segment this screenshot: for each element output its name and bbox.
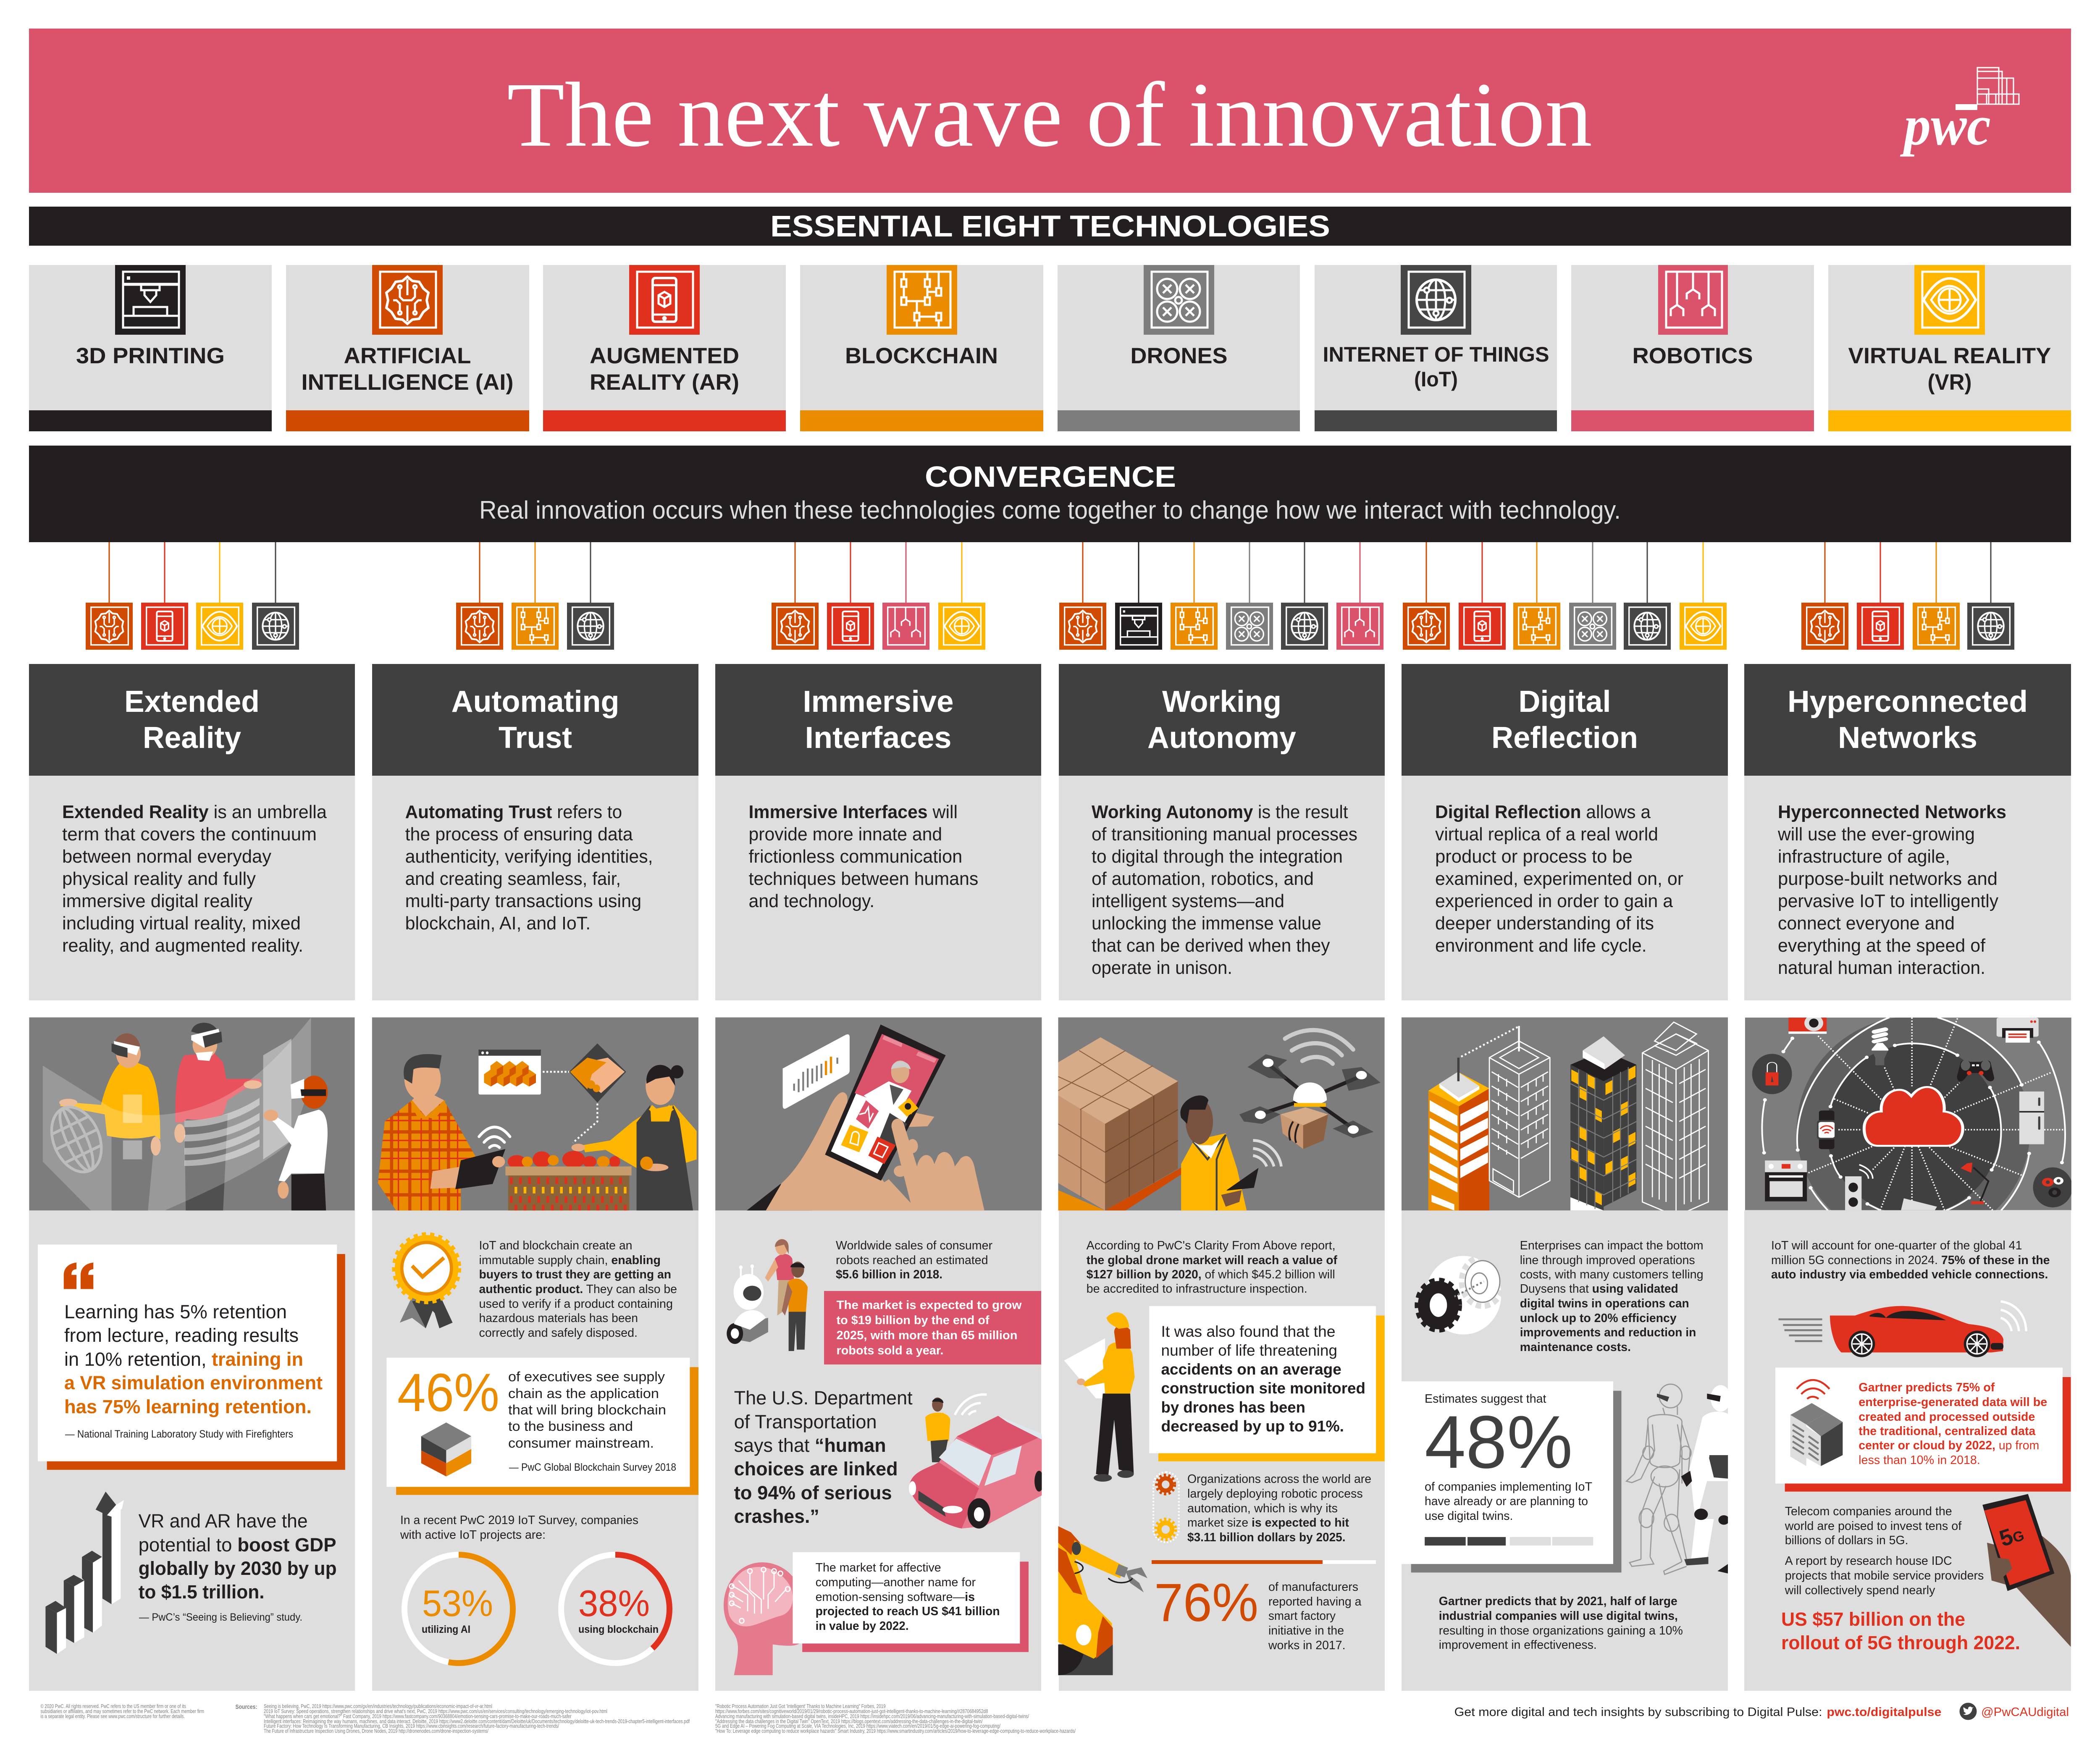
text: department of transportation: choices are linked bbox=[734, 1458, 898, 1480]
connector lines and icons: working autonomy bbox=[1059, 542, 1383, 650]
connector lines and icons: extended reality bbox=[86, 542, 299, 650]
chart: 53% utilizing AI donut bbox=[404, 1555, 513, 1663]
chart: 38% using blockchain donut bbox=[561, 1555, 669, 1663]
column: digital reflection definition: examined, experimented on, or bbox=[1435, 868, 1683, 889]
stat: 76% smart factory bbox=[1152, 1560, 1376, 1652]
stat card: 48% digital twins bbox=[1402, 1381, 1621, 1572]
illustration: hand holding 5G phone bbox=[1982, 1494, 2071, 1647]
column: working autonomy definition: unlocking the immense value bbox=[1092, 913, 1321, 934]
stat card: 46%: chain as the application bbox=[508, 1386, 659, 1401]
icon: quotation marks bbox=[64, 1262, 93, 1289]
card: affective computing: computing—another name for bbox=[816, 1576, 976, 1589]
illustration: drone and warehouse worker bbox=[1058, 1018, 1385, 1210]
technology card: virtual reality: (VR) bbox=[1928, 370, 1971, 395]
text: 5G connections bbox=[1771, 1239, 2050, 1281]
quote card: has 75% learning retention. bbox=[64, 1396, 312, 1417]
text: telecom investment bbox=[1781, 1505, 2020, 1653]
footer: sources: "What happens when cars get emotional?" Fast Company, 2019 https://www.fastcompany.com/90368804/emotion-sensing-cars-promise-to-make-our-roads-much-safer bbox=[264, 1713, 572, 1719]
text: immutable supply chain bbox=[479, 1239, 677, 1340]
illustration: construction worker with plans bbox=[1064, 1312, 1135, 1482]
column: working autonomy definition: that can be derived when they bbox=[1092, 935, 1330, 956]
stat: 76% smart factory: 76% bbox=[1154, 1573, 1258, 1633]
text: VR and AR GDP potential bbox=[139, 1510, 337, 1623]
column: hyperconnected networks definition: connect everyone and bbox=[1778, 913, 1955, 934]
column: automating trust definition: Automating bbox=[451, 685, 619, 719]
text: drone market: be accredited to infrastructure inspection. bbox=[1087, 1282, 1307, 1296]
footer: copyright note: subsidiaries or affiliates, and may sometimes refer to the PwC network. Each member firm bbox=[40, 1708, 204, 1714]
text: telecom investment: world are poised to invest tens of bbox=[1785, 1519, 1961, 1533]
technology card: blockchain bbox=[800, 265, 1043, 431]
column: extended reality definition: physical reality and fully bbox=[62, 868, 256, 889]
chart: 38% using blockchain donut: using blockchain bbox=[578, 1624, 659, 1635]
PwC logo: pwc bbox=[1900, 94, 1991, 157]
column: automating trust definition: blockchain, AI, and IoT. bbox=[405, 913, 591, 934]
text: robotic process automation bbox=[1187, 1472, 1371, 1544]
column: automating trust definition: and creating seamless, fair, bbox=[405, 868, 621, 889]
quote card bbox=[38, 1244, 345, 1470]
technology card: virtual reality bbox=[1828, 265, 2071, 431]
icon: award ribbon bbox=[394, 1235, 459, 1328]
card: drone accident reduction: number of life threatening bbox=[1161, 1342, 1337, 1359]
chart: 53% utilizing AI donut: utilizing AI bbox=[422, 1624, 470, 1635]
text: digital twin operations: line through improved operations bbox=[1520, 1254, 1695, 1267]
callout: market growth bbox=[824, 1291, 1041, 1364]
column: hyperconnected networks definition: will use the ever-growing bbox=[1777, 824, 1975, 845]
title banner bbox=[29, 29, 2071, 193]
text: VR and AR GDP potential: globally by 2030 by up bbox=[139, 1558, 337, 1579]
text: robotic process automation: automation, which is why its bbox=[1187, 1502, 1338, 1515]
stat: 76% smart factory: of manufacturers bbox=[1268, 1580, 1358, 1594]
footer: sources: Seeing is believing, PwC, 2019 https://www.pwc.com/gx/en/industries/technology/publications/economic-impact-of-vr-ar.html bbox=[264, 1703, 492, 1709]
text: immutable supply chain: hazardous materials has been bbox=[479, 1312, 638, 1325]
text: 5G connections: IoT will account for one-quarter of the global 41 bbox=[1771, 1239, 2022, 1252]
text: immutable supply chain: correctly and safely disposed. bbox=[479, 1326, 638, 1340]
text: digital twin operations bbox=[1520, 1239, 1704, 1354]
column: digital reflection definition: Digital bbox=[1519, 685, 1611, 719]
text: Gartner digital twins: improvement in effectiveness. bbox=[1439, 1638, 1597, 1652]
panel: immersive interfaces facts bbox=[724, 1239, 1044, 1675]
illustration: smartphone health app bbox=[715, 1018, 1042, 1210]
footer: sources: The Future of Infrastructure Inspection Using Drones, Drone Nodes, 2019 http://dronenodes.com/drone-inspection-systems/ bbox=[264, 1728, 488, 1734]
technology card: drones bbox=[1058, 265, 1300, 431]
footer: copyright note bbox=[40, 1703, 204, 1719]
column: digital reflection definition: product or process to be bbox=[1435, 846, 1633, 867]
callout: market growth: to $19 billion by the end of bbox=[837, 1314, 990, 1327]
card: affective computing: in value by 2022. bbox=[816, 1619, 909, 1633]
footer: sources: 2019 IoT Survey: Speed operations, strengthen relationships and drive what's next, PwC, 2019 https://www.pwc.com/us/en/services/consulting/technology/emerging-technology/iot-pov.html bbox=[264, 1708, 607, 1714]
text: 5G connections: auto industry via embedded vehicle connections. bbox=[1771, 1268, 2048, 1281]
footer: sources: Sources: bbox=[235, 1703, 257, 1711]
column: extended reality definition bbox=[29, 664, 355, 1000]
column: digital reflection definition: Digital Reflection allows a bbox=[1435, 802, 1651, 822]
column: automating trust definition: multi-party transactions using bbox=[405, 891, 641, 911]
text: immutable supply chain: authentic product. They can also be bbox=[479, 1283, 677, 1296]
card: Gartner enterprise data: less than 10% in 2018. bbox=[1858, 1454, 1980, 1467]
stat: 76% smart factory: initiative in the bbox=[1268, 1624, 1344, 1637]
column: working autonomy definition: Autonomy bbox=[1147, 721, 1296, 755]
text: robotic process automation: largely deploying robotic process bbox=[1187, 1487, 1363, 1501]
PwC logo bbox=[1900, 68, 2019, 157]
column: digital reflection definition: experienced in order to gain a bbox=[1435, 891, 1673, 911]
illustration: hand holding 5G phone: 5G bbox=[1996, 1520, 2026, 1551]
footer: call to action bbox=[1454, 1703, 2069, 1720]
footer: sources: "Robotic Process Automation Just Got 'Intelligent' Thanks to Machine Learning" Forbes, 2019 bbox=[715, 1703, 886, 1709]
column: working autonomy definition: of automation, robotics, and bbox=[1092, 868, 1314, 889]
technology card: artificial intelligence bbox=[286, 265, 529, 431]
column: working autonomy definition bbox=[1059, 664, 1385, 1000]
footer: call to action: Get more digital and tech insights by subscribing to Digital Pulse: bbox=[1454, 1705, 1822, 1719]
technology card: internet of things bbox=[1315, 265, 1557, 431]
section heading: essential eight technologies: ESSENTIAL EIGHT TECHNOLOGIES bbox=[770, 210, 1330, 243]
column: automating trust definition: the process of ensuring data bbox=[405, 824, 633, 845]
icon: process gears bbox=[1153, 1472, 1179, 1542]
text: department of transportation: crashes.” bbox=[734, 1506, 819, 1527]
text: VR and AR GDP potential: — PwC’s “Seeing is Believing” study. bbox=[139, 1611, 302, 1623]
text: telecom investment: billions of dollars in 5G. bbox=[1785, 1534, 1908, 1547]
text: department of transportation: of Transportation bbox=[734, 1411, 877, 1433]
card: affective computing bbox=[793, 1552, 1029, 1652]
text: robot sales bbox=[836, 1239, 993, 1281]
panel: extended reality facts bbox=[38, 1244, 345, 1654]
column: automating trust definition: Trust bbox=[499, 721, 572, 755]
column: hyperconnected networks definition: Hyperconnected Networks bbox=[1778, 802, 2006, 822]
stat card: 48% digital twins: use digital twins. bbox=[1425, 1509, 1513, 1523]
card: affective computing: emotion-sensing software—is bbox=[816, 1590, 975, 1604]
section heading: essential eight technologies bbox=[29, 207, 2071, 246]
card: Gartner enterprise data: created and processed outside bbox=[1858, 1410, 2035, 1424]
text: digital twin operations: improvements and reduction in bbox=[1520, 1326, 1696, 1339]
panel: working autonomy facts bbox=[1058, 1239, 1385, 1675]
illustration: pink car with driver bbox=[909, 1394, 1044, 1529]
technology card: 3D printing bbox=[29, 265, 272, 431]
stat card: 46%: of executives see supply bbox=[508, 1369, 665, 1384]
quote card: Learning has 5% retention bbox=[64, 1301, 287, 1322]
illustration: head with brain circuit bbox=[724, 1562, 809, 1675]
technology card: augmented reality: AUGMENTED bbox=[590, 344, 739, 368]
text: VR and AR GDP potential: potential to boost GDP bbox=[139, 1534, 336, 1556]
column: extended reality definition: between normal everyday bbox=[62, 846, 271, 867]
technology card: artificial intelligence: ARTIFICIAL bbox=[344, 344, 471, 368]
text: immutable supply chain: buyers to trust they are getting an bbox=[479, 1268, 671, 1281]
convergence banner: Real innovation occurs when these technologies come together to change how we interact with technology. bbox=[479, 496, 1621, 524]
technology card: virtual reality: VIRTUAL REALITY bbox=[1848, 344, 2051, 368]
column: digital reflection definition: virtual replica of a real world bbox=[1435, 824, 1658, 845]
footer: sources: Advancing manufacturing with simulation-based digital twins, insideHPC, 2019 https://insidehpc.com/2019/06/advancing-manufacturing-with-simulation-based-digital-twins/ bbox=[715, 1713, 1029, 1719]
illustration: digital twin buildings bbox=[1402, 1018, 1728, 1216]
text: immutable supply chain: used to verify if a product containing bbox=[479, 1297, 673, 1311]
column: hyperconnected networks definition: pervasive IoT to intelligently bbox=[1778, 891, 1998, 911]
convergence banner: CONVERGENCE bbox=[925, 460, 1176, 493]
column: automating trust definition: Automating Trust refers to bbox=[405, 802, 622, 822]
footer: sources: https://www.forbes.com/sites/cognitiveworld/2019/01/29/robotic-process-automation-just-got-intelligent-thanks-to-machine-learning/#2870684952d8 bbox=[715, 1708, 988, 1714]
text: drone market: the global drone market will reach a value of bbox=[1087, 1254, 1337, 1267]
card: Gartner enterprise data: center or cloud by 2022, up from bbox=[1858, 1439, 2039, 1452]
text: immutable supply chain: immutable supply chain, enabling bbox=[479, 1254, 661, 1267]
stat: 76% smart factory: reported having a bbox=[1268, 1595, 1362, 1608]
column: hyperconnected networks definition: Networks bbox=[1838, 721, 1977, 755]
card: Gartner enterprise data: the traditional, centralized data bbox=[1858, 1425, 2036, 1438]
column: hyperconnected networks definition: Hyperconnected bbox=[1788, 685, 2028, 719]
column: working autonomy definition: intelligent systems—and bbox=[1092, 891, 1284, 911]
stat card: 46% bbox=[386, 1358, 698, 1495]
column: extended reality definition: Extended Reality is an umbrella bbox=[62, 802, 327, 822]
column: digital reflection definition bbox=[1402, 664, 1728, 1000]
title: The next wave of innovation bbox=[507, 63, 1592, 166]
column: digital reflection definition: environment and life cycle. bbox=[1435, 935, 1647, 956]
stat card: 46%: to the business and bbox=[508, 1419, 633, 1434]
text: immutable supply chain: IoT and blockchain create an bbox=[479, 1239, 633, 1252]
column: immersive interfaces definition: Interfaces bbox=[805, 721, 952, 755]
column: hyperconnected networks definition bbox=[1744, 664, 2071, 1000]
card: Gartner enterprise data: Gartner predicts 75% of bbox=[1858, 1381, 1995, 1394]
chart: 53% utilizing AI donut: 53% bbox=[422, 1582, 493, 1624]
card: drone accident reduction: by drones has been bbox=[1161, 1398, 1305, 1416]
column: hyperconnected networks definition: infrastructure of agile, bbox=[1778, 846, 1950, 867]
connector lines and icons: automating trust bbox=[456, 542, 614, 650]
technology card: drones: DRONES bbox=[1131, 344, 1227, 368]
stat card: 46%: consumer mainstream. bbox=[508, 1435, 654, 1451]
text: digital twin operations: costs, with many customers telling bbox=[1520, 1268, 1704, 1281]
illustration: robot and two people bbox=[727, 1239, 808, 1351]
column: automating trust definition bbox=[372, 664, 698, 1000]
footer: sources: 5G and Edge AI – Powering Fog Computing at Scale, VIA Technologies, Inc, 2019 https://www.viatech.com/en/2019/01/5g-edge-ai-powering-fog-computing/ bbox=[715, 1723, 1000, 1729]
text: Gartner digital twins: Gartner predicts that by 2021, half of large bbox=[1439, 1595, 1677, 1608]
footer: copyright note: is a separate legal entity. Please see www.pwc.com/structure for further details. bbox=[40, 1713, 185, 1719]
technology card: augmented reality: REALITY (AR) bbox=[590, 370, 739, 395]
icon: physical and digital gears bbox=[1417, 1256, 1504, 1335]
column: immersive interfaces definition: Immersive Interfaces will bbox=[748, 802, 958, 822]
column: hyperconnected networks definition: natural human interaction. bbox=[1778, 958, 1985, 978]
quote card: — National Training Laboratory Study with Firefighters bbox=[65, 1428, 293, 1440]
stat card: 48% digital twins: have already or are planning to bbox=[1425, 1495, 1588, 1508]
column: extended reality definition: including virtual reality, mixed bbox=[62, 913, 301, 934]
stat card: 48% digital twins: of companies implementing IoT bbox=[1425, 1480, 1592, 1493]
text: telecom investment: A report by research house IDC bbox=[1785, 1554, 1952, 1568]
text: department of transportation: The U.S. Department bbox=[734, 1387, 913, 1409]
column: working autonomy definition: Working Autonomy is the result bbox=[1092, 802, 1348, 822]
column: extended reality definition: immersive digital reality bbox=[62, 891, 252, 911]
column: immersive interfaces definition: and technology. bbox=[748, 891, 874, 911]
card: Gartner enterprise data bbox=[1775, 1367, 2071, 1492]
footer: sources: Intelligent interfaces: Reimagining the way humans, machines, and data interact. Deloitte, 2019 https://www2.deloitte.com/content/dam/Deloitte/uk/Documents/technology/deloitte-uk-tech-trends-2019-chapter5-intelligent-interfaces.pdf bbox=[264, 1719, 690, 1724]
stat card: 48% digital twins: Estimates suggest that bbox=[1425, 1392, 1546, 1406]
footer: call to action: pwc.to/digitalpulse bbox=[1827, 1705, 1941, 1719]
technology card: internet of things: (IoT) bbox=[1414, 367, 1458, 391]
footer: sources bbox=[235, 1703, 1076, 1734]
column: immersive interfaces definition: frictionless communication bbox=[748, 846, 962, 867]
text: Gartner digital twins bbox=[1439, 1595, 1683, 1652]
column: immersive interfaces definition bbox=[715, 664, 1041, 1000]
column: immersive interfaces definition: Immersive bbox=[803, 685, 953, 719]
footer: call to action: @PwCAUdigital bbox=[1981, 1705, 2069, 1719]
card: affective computing: The market for affective bbox=[816, 1561, 941, 1574]
text: digital twin operations: unlock up to 20% efficiency bbox=[1520, 1312, 1677, 1325]
callout: market growth: 2025, with more than 65 million bbox=[837, 1329, 1017, 1342]
stat: 76% smart factory: smart factory bbox=[1268, 1609, 1336, 1623]
convergence banner bbox=[29, 446, 2071, 542]
illustration: people using VR screens bbox=[29, 1018, 355, 1210]
text: robotic process automation: market size is expected to hit bbox=[1187, 1516, 1349, 1530]
text: department of transportation bbox=[734, 1387, 913, 1527]
text: digital twin operations: Enterprises can impact the bottom bbox=[1520, 1239, 1704, 1252]
callout: market growth: robots sold a year. bbox=[837, 1344, 943, 1357]
card: drone accident reduction: accidents on an average bbox=[1161, 1361, 1341, 1378]
text: department of transportation: to 94% of serious bbox=[734, 1482, 892, 1503]
icon: rising bar chart bbox=[45, 1492, 124, 1654]
illustration: farmer with blockchain supply chain bbox=[372, 1018, 698, 1210]
text: department of transportation: says that “human bbox=[734, 1435, 886, 1456]
text: digital twin operations: maintenance costs. bbox=[1520, 1341, 1631, 1354]
column: digital reflection definition: Reflection bbox=[1491, 721, 1638, 755]
column: extended reality definition: reality, and augmented reality. bbox=[62, 935, 303, 956]
footer: sources: Future Factory: How Technology Is Transforming Manufacturing, CB Insights, 2019 https://www.cbinsights.com/research/future-factory-manufacturing-tech-trends/ bbox=[264, 1723, 559, 1729]
column: extended reality definition: Reality bbox=[143, 721, 241, 755]
column: digital reflection definition: deeper understanding of its bbox=[1435, 913, 1654, 934]
text: Gartner digital twins: industrial companies will use digital twins, bbox=[1439, 1609, 1678, 1623]
stat card: 46%: that will bring blockchain bbox=[508, 1402, 666, 1417]
text: telecom investment: will collectively spend nearly bbox=[1785, 1584, 1935, 1597]
stat card: 48% digital twins: 48% bbox=[1425, 1400, 1572, 1484]
column: hyperconnected networks definition: everything at the speed of bbox=[1778, 935, 1986, 956]
illustration: connected IoT devices around cloud bbox=[1745, 1018, 2071, 1210]
quote card: in 10% retention, training in bbox=[64, 1349, 303, 1370]
stat: 76% smart factory: works in 2017. bbox=[1268, 1639, 1346, 1652]
lower panel backgrounds bbox=[29, 1210, 2071, 1691]
text: robotic process automation: $3.11 billion dollars by 2025. bbox=[1187, 1531, 1346, 1544]
footer: sources: "How To: Leverage edge computing to reduce workplace hazards" Smart Industry, 2019 https://www.smartindustry.com/articles/2019/how-to-leverage-edge-computing-to-reduce-workplace-hazards/ bbox=[715, 1728, 1076, 1734]
illustration: wireframe and white robots bbox=[1626, 1384, 1731, 1574]
quote card: from lecture, reading results bbox=[64, 1325, 299, 1346]
technology card: robotics: ROBOTICS bbox=[1632, 344, 1753, 368]
chart: 38% using blockchain donut: 38% bbox=[578, 1582, 650, 1624]
illustration: connected red car bbox=[1778, 1301, 2026, 1357]
text: digital twin operations: Duysens that using validated bbox=[1520, 1282, 1678, 1296]
column: working autonomy definition: operate in unison. bbox=[1092, 958, 1232, 978]
text: telecom investment: US $57 billion on the bbox=[1781, 1608, 1965, 1630]
technology card: robotics bbox=[1571, 265, 1814, 431]
text: robotic process automation: Organizations across the world are bbox=[1187, 1472, 1371, 1486]
column: working autonomy definition: to digital through the integration bbox=[1092, 846, 1343, 867]
card: drone accident reduction: decreased by up to 91%. bbox=[1161, 1418, 1344, 1435]
card: Gartner enterprise data: enterprise-generated data will be bbox=[1858, 1396, 2047, 1409]
text: telecom investment: Telecom companies around the bbox=[1785, 1505, 1952, 1518]
text: 5G connections: million 5G connections in 2024. 75% of these in the bbox=[1771, 1254, 2050, 1267]
text: telecom investment: projects that mobile service providers bbox=[1785, 1569, 1984, 1582]
panel: digital reflection facts bbox=[1402, 1239, 1731, 1652]
column: automating trust definition: authenticity, verifying identities, bbox=[405, 846, 653, 867]
card: drone accident reduction: construction site monitored bbox=[1161, 1380, 1365, 1397]
text: IoT survey intro bbox=[400, 1514, 638, 1542]
text: robot sales: Worldwide sales of consumer bbox=[836, 1239, 993, 1252]
column: immersive interfaces definition: provide more innate and bbox=[748, 824, 942, 845]
footer: sources: "Addressing the data challenges in the Digital Twin" OpenText, 2019 https://blogs.opentext.com/addressing-the-data-challenges-in-the-digital-twin/ bbox=[715, 1719, 983, 1724]
text: telecom investment: rollout of 5G through 2022. bbox=[1781, 1632, 2020, 1653]
text: IoT survey intro: with active IoT projects are: bbox=[400, 1528, 546, 1542]
column: immersive interfaces definition: techniques between humans bbox=[748, 868, 978, 889]
panel: automating trust facts bbox=[386, 1235, 698, 1663]
text: drone market bbox=[1087, 1239, 1337, 1296]
text: VR and AR GDP potential: VR and AR have the bbox=[139, 1510, 308, 1532]
text: Gartner digital twins: resulting in those organizations gaining a 10% bbox=[1439, 1624, 1683, 1637]
text: drone market: $127 billion by 2020, of which $45.2 billion will bbox=[1087, 1268, 1335, 1281]
technology card: augmented reality bbox=[543, 265, 786, 431]
text: robot sales: robots reached an estimated bbox=[836, 1254, 988, 1267]
text: drone market: According to PwC's Clarity From Above report, bbox=[1087, 1239, 1336, 1252]
callout: market growth: The market is expected to grow bbox=[837, 1299, 1022, 1312]
progress bar bbox=[1425, 1537, 1593, 1545]
technology card: 3D printing: 3D PRINTING bbox=[76, 344, 225, 368]
column: extended reality definition: term that covers the continuum bbox=[62, 824, 317, 845]
icon: server racks with wifi bbox=[1790, 1380, 1843, 1466]
card: drone accident reduction: It was also found that the bbox=[1161, 1323, 1336, 1340]
text: IoT survey intro: In a recent PwC 2019 IoT Survey, companies bbox=[400, 1514, 638, 1527]
text: VR and AR GDP potential: to $1.5 trillion. bbox=[139, 1581, 265, 1603]
technology card: blockchain: BLOCKCHAIN bbox=[845, 344, 998, 368]
panel: hyperconnected networks facts bbox=[1771, 1239, 2071, 1653]
text: digital twin operations: digital twins in operations can bbox=[1520, 1297, 1689, 1310]
card: drone accident reduction bbox=[1149, 1306, 1385, 1461]
connector lines and icons: hyperconnected networks bbox=[1801, 542, 2014, 650]
connector lines and icons: digital reflection bbox=[1403, 542, 1727, 650]
text: robot sales: $5.6 billion in 2018. bbox=[836, 1268, 942, 1281]
card: affective computing: projected to reach US $41 billion bbox=[816, 1605, 1000, 1618]
illustration: robotic arm bbox=[1058, 1526, 1147, 1675]
technology card: artificial intelligence: INTELLIGENCE (AI) bbox=[302, 370, 513, 395]
quote card: a VR simulation environment bbox=[64, 1372, 323, 1393]
technology card: internet of things: INTERNET OF THINGS bbox=[1323, 343, 1549, 366]
column: working autonomy definition: of transitioning manual processes bbox=[1092, 824, 1357, 845]
column: working autonomy definition: Working bbox=[1162, 685, 1281, 719]
column: extended reality definition: Extended bbox=[124, 685, 260, 719]
column: hyperconnected networks definition: purpose-built networks and bbox=[1778, 868, 1998, 889]
stat card: 46%: — PwC Global Blockchain Survey 2018 bbox=[509, 1461, 676, 1473]
footer: copyright note: © 2020 PwC. All rights reserved. PwC refers to the US member firm or one of its bbox=[40, 1703, 186, 1709]
connector lines and icons: immersive interfaces bbox=[772, 542, 985, 650]
icon: twitter bbox=[1960, 1703, 1977, 1720]
stat card: 46%: 46% bbox=[397, 1363, 499, 1423]
